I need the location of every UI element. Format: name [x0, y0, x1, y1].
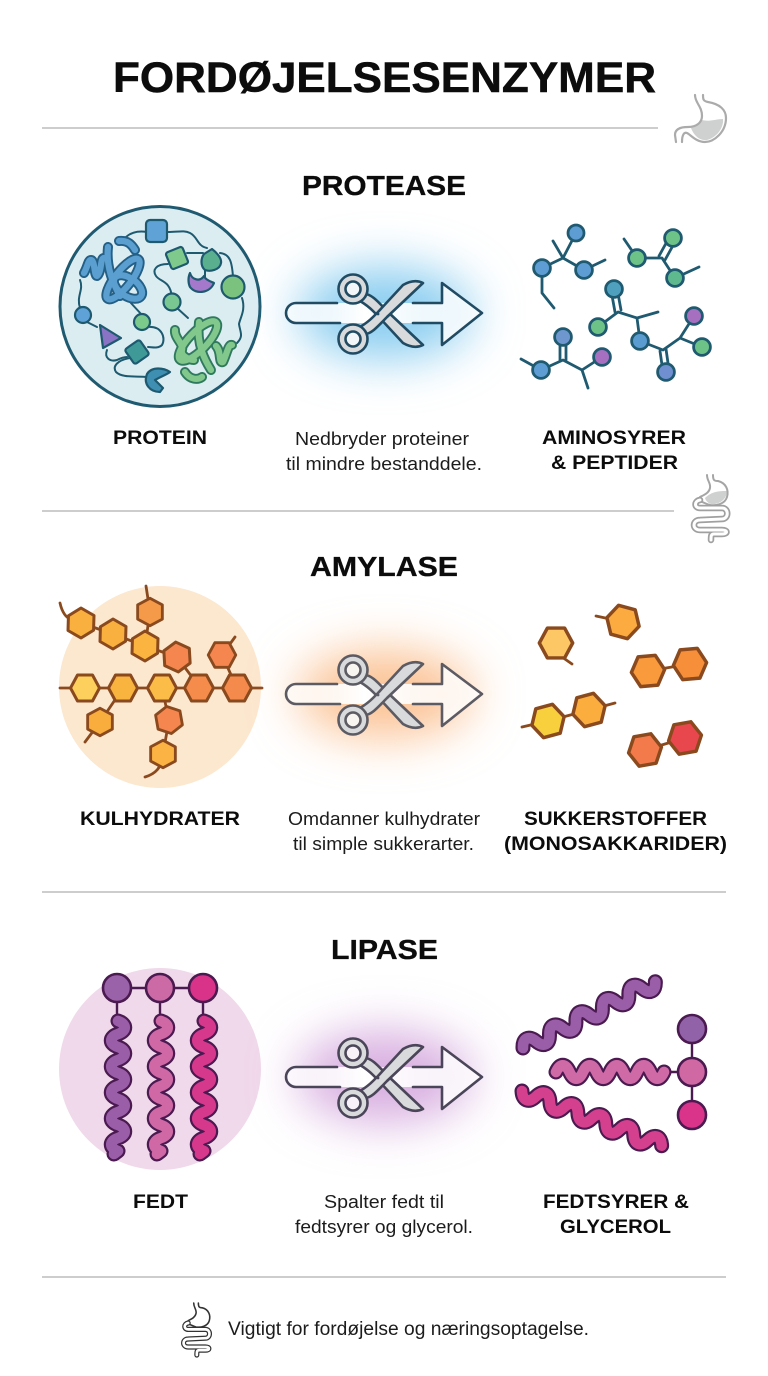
arrow — [286, 283, 482, 345]
blue protein knot — [84, 241, 146, 304]
label: amino acids: & PEPTIDER — [551, 452, 678, 474]
glow — [297, 1031, 473, 1123]
label: sugars: (MONOSAKKARIDER) — [504, 833, 727, 855]
description: protease: til mindre bestanddele. — [286, 453, 482, 474]
panel: sugars — [522, 603, 708, 768]
label: sugars: SUKKERSTOFFER — [524, 808, 707, 830]
divider 4 — [42, 1276, 726, 1278]
protein connectors — [79, 231, 243, 377]
arrow — [286, 664, 482, 726]
heading: protease: PROTEASE — [302, 170, 466, 201]
carbohydrate hexagons — [62, 598, 252, 768]
heading: lipase: LIPASE — [331, 934, 438, 965]
label: sugars — [504, 808, 727, 855]
panel: protease scissors and arrow — [286, 267, 482, 359]
panel: fatty acids and glycerol — [520, 976, 706, 1152]
green protein knot — [173, 316, 232, 379]
title: FORDØJELSESENZYMER — [113, 54, 656, 102]
panel: fat circle — [59, 968, 261, 1170]
description: lipase: Spalter fedt til — [324, 1191, 444, 1212]
label: fatty acids: GLYCEROL — [560, 1216, 671, 1238]
label: amino acids: AMINOSYRER — [542, 427, 686, 449]
description: lipase: fedtsyrer og glycerol. — [295, 1216, 473, 1237]
description: protease — [286, 428, 482, 474]
panel: lipase scissors and arrow — [286, 1031, 482, 1123]
label: carbohydrates: KULHYDRATER — [80, 808, 240, 830]
carbohydrate bonds — [60, 586, 262, 777]
label: fat: FEDT — [133, 1191, 188, 1213]
fatty acid chains — [111, 1021, 211, 1154]
description: amylase: Omdanner kulhydrater — [288, 808, 480, 829]
footer text: Vigtigt for fordøjelse og næringsoptagelse. — [228, 1319, 589, 1340]
glow — [297, 267, 473, 359]
scissors — [338, 656, 423, 734]
panel: carbohydrate circle — [59, 586, 262, 788]
divider 2 — [42, 510, 674, 512]
protein nodes — [75, 220, 244, 392]
description: amylase: til simple sukkerarter. — [293, 833, 474, 854]
label: fatty acids — [543, 1191, 689, 1238]
description: lipase — [295, 1191, 473, 1237]
scissors — [338, 274, 423, 354]
label: fatty acids: FEDTSYRER & — [543, 1191, 689, 1213]
glycerol connectors — [117, 988, 203, 1016]
icon: stomach — [675, 95, 726, 142]
glycerol nodes — [103, 974, 217, 1002]
panel: amino acids and peptides — [521, 225, 710, 388]
description: amylase — [288, 808, 480, 854]
divider 3 — [42, 891, 726, 893]
arrow — [286, 1047, 482, 1109]
panel: amylase scissors and arrow — [286, 650, 482, 738]
scissors — [338, 1038, 423, 1118]
icon: stomach and intestine — [694, 475, 728, 540]
glow — [297, 650, 473, 738]
label: protein: PROTEIN — [113, 427, 207, 449]
divider 1 — [42, 127, 658, 129]
label: amino acids — [542, 427, 686, 474]
description: protease: Nedbryder proteiner — [295, 428, 469, 449]
heading: amylase: AMYLASE — [310, 551, 458, 582]
icon: footer stomach and intestine — [184, 1303, 210, 1355]
panel: protein circle — [60, 206, 260, 406]
